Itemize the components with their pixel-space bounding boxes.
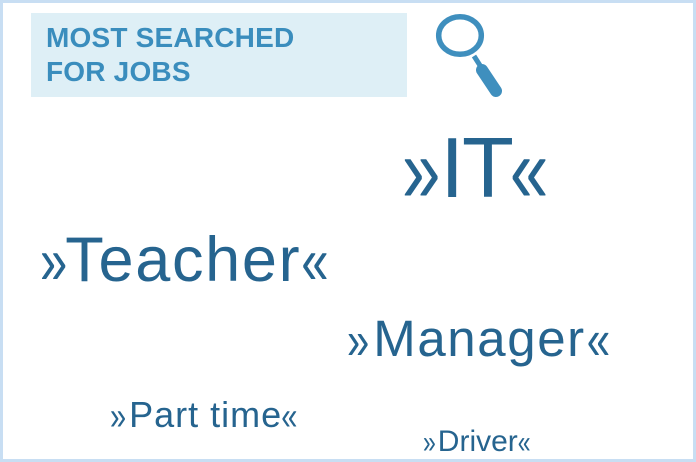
word: Teacher: » (40, 225, 67, 298)
word: Manager: « (587, 308, 610, 371)
word: IT: « (510, 119, 548, 222)
word: Manager: Manager (373, 310, 586, 367)
word: Manager: » (347, 311, 369, 371)
word: IT (402, 119, 548, 222)
title text (46, 22, 294, 87)
word: IT: » (402, 119, 440, 222)
word: IT: IT (440, 121, 512, 216)
word: Part time: » (110, 395, 126, 438)
word: Driver (423, 424, 531, 459)
word: Part time: Part time (129, 394, 282, 435)
word: Driver: « (518, 424, 531, 459)
title text: MOST SEARCHED (46, 22, 294, 53)
word: Part time: « (281, 395, 297, 438)
word: Teacher: « (301, 225, 329, 298)
word: Driver: » (423, 424, 436, 459)
title panel (31, 13, 407, 97)
word: Driver: Driver (438, 425, 518, 458)
word: Teacher: Teacher (65, 225, 301, 295)
icon: magnifying glass (436, 14, 502, 97)
title text: FOR JOBS (46, 56, 191, 87)
